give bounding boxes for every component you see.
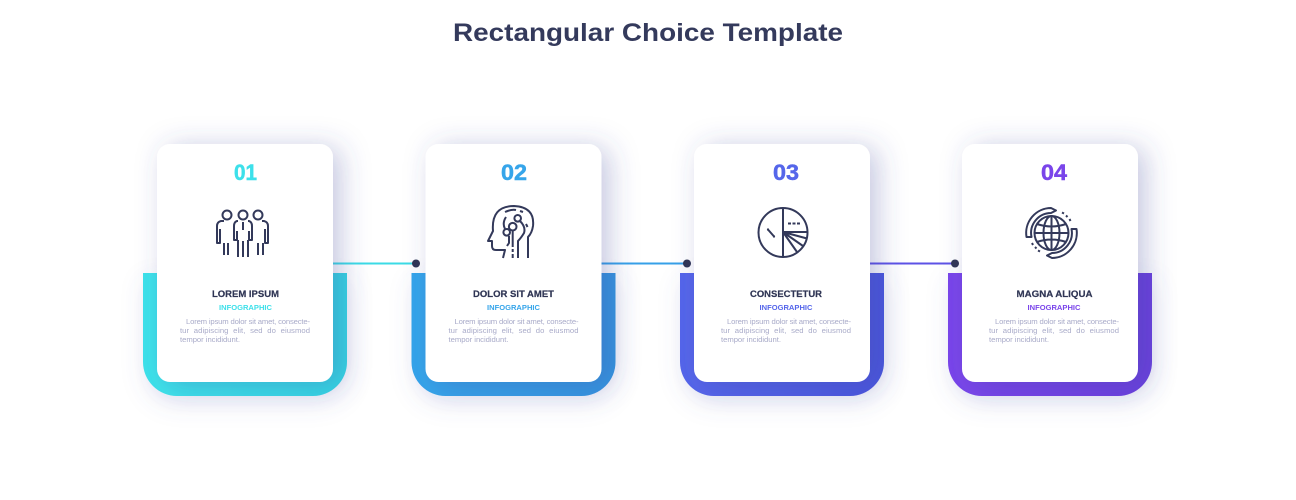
card 04 [962, 144, 1138, 382]
heading 01: LOREM IPSUM [212, 289, 279, 300]
label 03: INFOGRAPHIC [760, 303, 813, 312]
text block 02 [448, 317, 579, 344]
text block 03 [721, 317, 851, 344]
text block 01 [180, 317, 310, 344]
icon: people [217, 210, 268, 257]
text block 02: tur adipiscing elit, sed do eiusmod [448, 326, 578, 335]
text block 04: Lorem ipsum dolor sit amet, consecte- [995, 317, 1119, 326]
heading 04: MAGNA ALIQUA [1016, 289, 1093, 300]
number 02: 02 [501, 160, 527, 185]
connector 01 [333, 260, 420, 268]
colored base 02 [412, 273, 616, 396]
panel: step 03 [680, 144, 959, 396]
colored base 01 [143, 273, 347, 396]
text block 02: tempor incididunt. [448, 335, 508, 344]
text block 04 [989, 317, 1119, 344]
icon: pie chart [758, 208, 808, 257]
text block 01: Lorem ipsum dolor sit amet, consecte- [186, 317, 310, 326]
text block 04: tempor incididunt. [989, 335, 1049, 344]
card 02 [426, 144, 602, 382]
card 01 [157, 144, 333, 382]
colored base 03 [680, 273, 884, 396]
panel: step 04 [948, 144, 1152, 396]
label 01: INFOGRAPHIC [219, 303, 273, 312]
text block 01: tur adipiscing elit, sed do eiusmod [180, 326, 310, 335]
heading 02: DOLOR SIT AMET [473, 289, 554, 300]
icon: globe with arrows [1026, 208, 1077, 258]
number 04: 04 [1041, 160, 1068, 185]
connector 02 [601, 260, 691, 268]
label 04: INFOGRAPHIC [1028, 303, 1081, 312]
text block 03: tur adipiscing elit, sed do eiusmod [721, 326, 851, 335]
panel: step 02 [412, 144, 691, 396]
text block 01: tempor incididunt. [180, 335, 240, 344]
text block 03: Lorem ipsum dolor sit amet, consecte- [727, 317, 851, 326]
card 03 [694, 144, 870, 382]
panel: step 01 [143, 144, 420, 396]
label 02: INFOGRAPHIC [487, 303, 541, 312]
colored base 04 [948, 273, 1152, 396]
icon: head with circuit [488, 206, 533, 258]
text block 03: tempor incididunt. [721, 335, 781, 344]
number 03: 03 [773, 160, 799, 185]
heading 03: CONSECTETUR [750, 289, 822, 300]
text block 04: tur adipiscing elit, sed do eiusmod [989, 326, 1119, 335]
number 01: 01 [234, 160, 257, 185]
text block 02: Lorem ipsum dolor sit amet, consecte- [454, 317, 579, 326]
title: Rectangular Choice Template [453, 19, 843, 47]
connector 03 [870, 260, 959, 268]
